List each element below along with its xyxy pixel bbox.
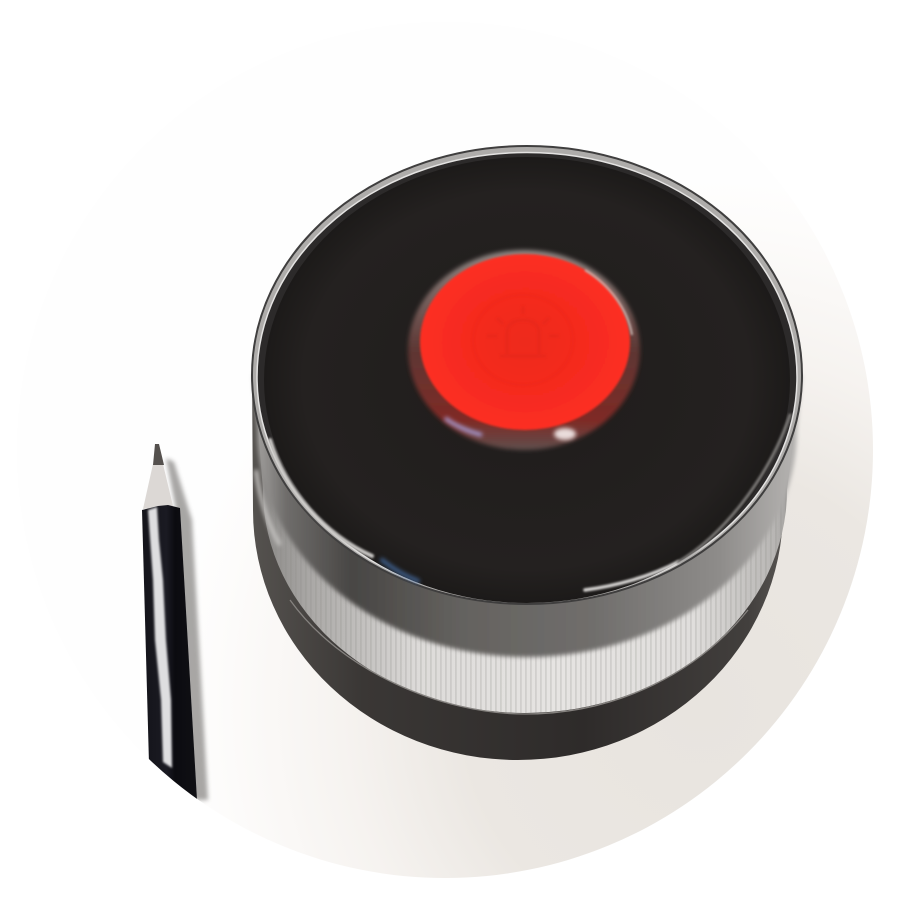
red button rim [408, 250, 640, 450]
pencil highlight [148, 507, 172, 768]
beacon body: lower dark band [252, 375, 803, 760]
icon: embossed alarm light [473, 295, 573, 385]
pencil shadow [166, 458, 208, 800]
beacon lens: ribbed white band [254, 375, 802, 714]
black top face [264, 157, 790, 603]
pencil [142, 444, 208, 800]
glass top ring [252, 146, 802, 604]
photo: beacon and pencil [142, 145, 873, 878]
beacon collar: grey glass band [253, 375, 802, 657]
glass rim highlights [270, 415, 790, 590]
glass ring inner line [257, 152, 797, 602]
glass left edge highlight [256, 470, 280, 545]
red button top glint [585, 270, 632, 335]
red button bottom glints [445, 418, 576, 440]
pencil graphite point [153, 444, 164, 465]
beacon light [252, 146, 803, 760]
pencil body [142, 505, 197, 800]
pencil wood tip [143, 464, 173, 509]
red button face [420, 254, 630, 430]
